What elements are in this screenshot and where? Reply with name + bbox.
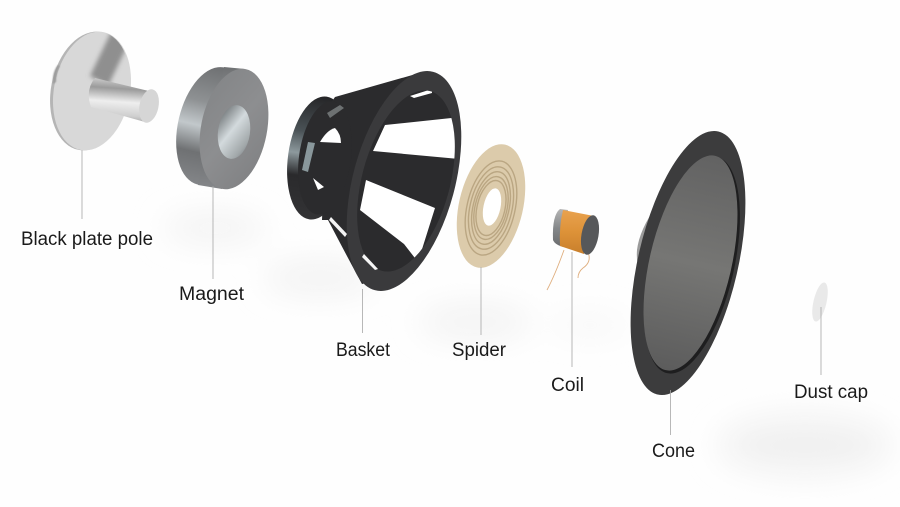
leader line: cone [670,390,672,435]
leader line: coil [571,252,573,367]
dust cap disc [809,281,831,323]
coil body [553,209,602,256]
soft floor shadows [165,216,890,473]
label: cone: Cone [652,441,695,462]
label: basket: Basket [336,340,391,361]
leader line: magnet [212,186,214,279]
leader line: dust cap [820,307,822,375]
pole rod [89,78,162,125]
component: magnet [165,60,278,305]
label: black plate pole: Black plate pole [21,229,153,250]
label: coil: Coil [551,375,584,396]
leader line: basket [362,289,364,333]
leader line: black plate pole [81,148,83,219]
label: spider: Spider [452,340,507,361]
label: dust cap: Dust cap [794,382,868,403]
component: black plate pole [21,25,162,250]
magnet ring [165,60,278,195]
component: basket [287,71,462,356]
component: cone [609,120,767,462]
cone body [609,120,767,406]
component: spider [446,137,536,361]
plate disc [50,32,131,150]
basket frame [287,71,462,291]
component: dust cap [794,281,868,403]
spider disc [446,137,536,275]
label: magnet: Magnet [179,284,245,305]
component: coil [547,209,602,396]
leader line: spider [480,267,482,335]
coil wires [547,250,589,290]
